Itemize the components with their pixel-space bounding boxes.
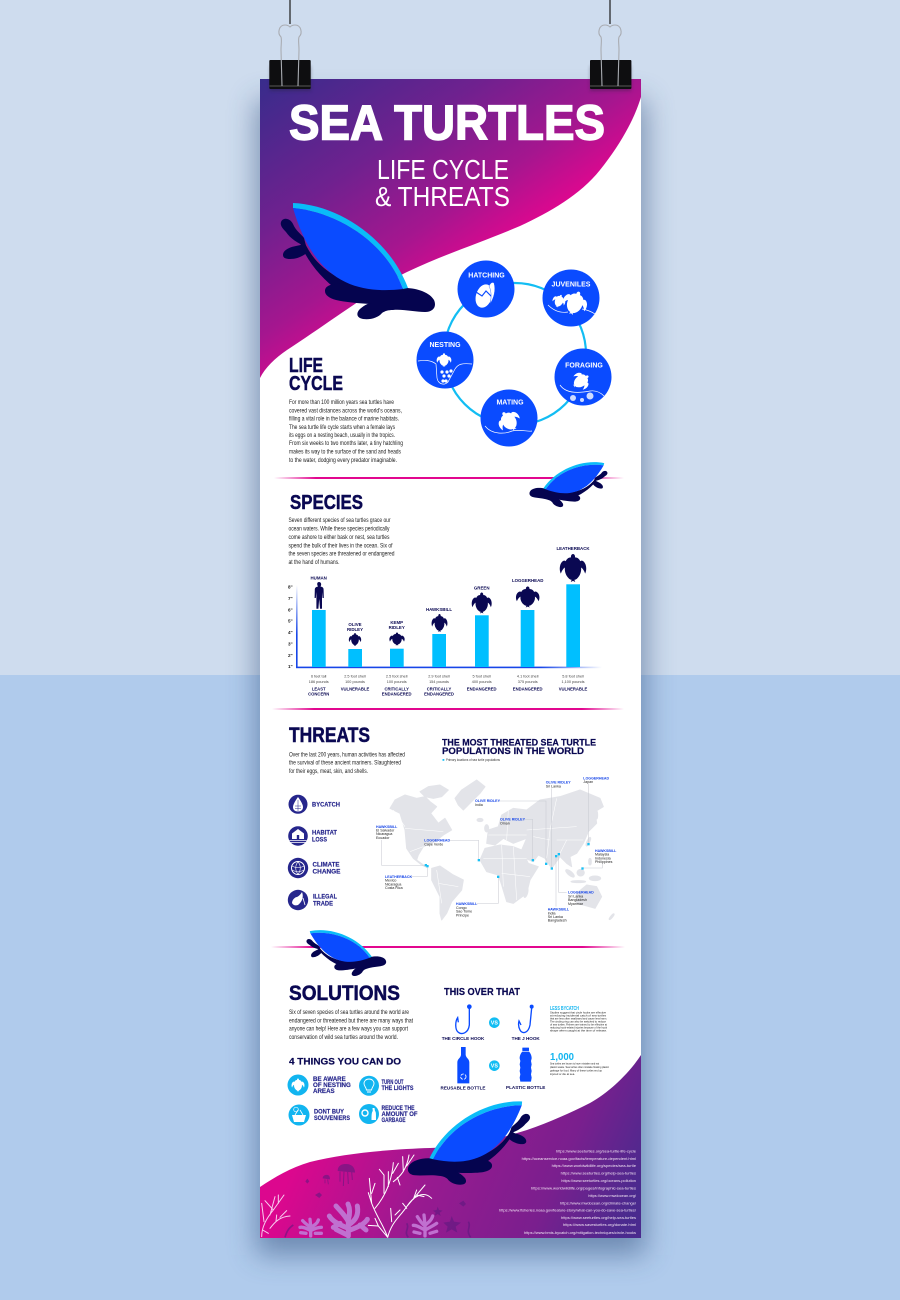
comparison captions: REUSABLE BOTTLE <box>441 1086 485 1090</box>
map labels: Nicaragua <box>376 832 392 836</box>
y axis labels: 5" <box>288 619 293 624</box>
callout: less bycatch <box>550 1006 607 1032</box>
action: souvenirs: DONT BUY <box>314 1108 345 1116</box>
action: lights: TURN OUT <box>382 1079 404 1086</box>
threat: habitat loss: LOSS <box>312 836 327 844</box>
text: life cycle intro: From six weeks to two months later, a tiny hatchling <box>289 440 403 447</box>
divider <box>272 708 624 710</box>
text: life cycle intro: The sea turtle life cycle starts when a female lays <box>289 424 395 431</box>
lilac corals <box>300 1204 437 1236</box>
map labels: OLIVE RIDLEY <box>546 780 571 784</box>
callout: 1,000 <box>550 1052 609 1076</box>
panel: life cycle <box>289 260 612 464</box>
text: life cycle intro: to the water, dodging every predator imaginable. <box>289 457 397 464</box>
map heading <box>442 737 596 756</box>
header wave <box>260 79 641 378</box>
text: solutions intro <box>289 1009 413 1041</box>
size captions: 4.1 foot shell <box>517 674 539 678</box>
source links: https://www.seeturtles.org/help-sea-turtles <box>561 1170 636 1176</box>
threat: illegal trade: ILLEGAL <box>313 894 337 900</box>
badge: vs hooks: VS <box>491 1021 498 1027</box>
text: life cycle intro: makes its way to the surface of the sand and heads <box>289 449 401 456</box>
status labels: CONCERN <box>308 692 329 696</box>
text: solutions intro: Six of seven species of sea turtles around the world are <box>289 1009 409 1016</box>
size captions: 1,100 pounds <box>561 680 585 684</box>
source links: https://www.worldwildlife.org/pages/infographic-sea-turtles <box>531 1186 636 1190</box>
map labels: Sao Tome <box>456 910 472 914</box>
text: life cycle intro: For more than 100 million years sea turtles have <box>289 399 394 406</box>
map labels: India <box>548 912 555 916</box>
stage: juveniles <box>542 270 600 326</box>
callout: 1,000: plastic waste. Sea turtles often mistake floating plastic <box>550 1065 609 1069</box>
chart: life cycle ring <box>444 283 586 425</box>
source links: https://www.mwdocean.org/climate-change/ <box>560 1200 637 1206</box>
callout: less bycatch: that are less often swallowed and cause less harm. <box>550 1016 607 1020</box>
y axis labels: 6" <box>288 607 293 612</box>
map labels: Indonesia <box>595 856 611 860</box>
species names: GREEN <box>474 586 490 590</box>
source links: https://www.bmis-bycatch.org/mitigation-techniques/circle-hooks <box>524 1230 636 1235</box>
species names: HUMAN <box>311 576 327 580</box>
subtitle: & THREATS <box>375 181 510 212</box>
map labels <box>376 776 617 922</box>
source links: https://oceanservice.noaa.gov/facts/temperature-dependent.html <box>522 1156 636 1161</box>
species names: HAWKSBILL <box>426 607 452 612</box>
map labels: Philippines <box>595 860 613 864</box>
heading: solutions: SOLUTIONS <box>289 982 400 1005</box>
threat: illegal trade: TRADE <box>313 900 333 908</box>
callout: less bycatch: at reducing incidental catch of sea turtles <box>550 1014 607 1018</box>
threat: bycatch: BYCATCH <box>312 802 340 808</box>
heading: threats: THREATS <box>289 724 370 747</box>
turtle: footer <box>407 1092 531 1190</box>
stage: hatching: HATCHING <box>468 272 505 280</box>
y axis labels: 8" <box>288 584 293 590</box>
source links: https://www.fisheries.noaa.gov/feature-story/what-can-you-do-save-sea-turtles/ <box>499 1208 637 1212</box>
map labels: Mexico <box>385 878 396 882</box>
status labels: ENDANGERED <box>513 686 543 692</box>
map labels: HAWKSBILL <box>548 908 570 912</box>
y axis labels: 4" <box>288 630 293 635</box>
map labels: LOGGERHEAD <box>424 838 450 842</box>
text: solutions intro: anyone can help! Here are a few ways you can support <box>289 1026 408 1033</box>
heading: species: SPECIES <box>290 492 363 514</box>
status labels: ENDANGERED <box>424 692 454 696</box>
comparison captions <box>441 1036 545 1090</box>
map labels: Sri Lanka <box>546 784 561 788</box>
bar chart: species size <box>288 546 602 696</box>
action: nesting areas <box>288 1074 351 1096</box>
map labels: LEATHERBACK <box>385 875 412 879</box>
source links: https://www.savesturtles.org/donate.html <box>563 1222 636 1227</box>
status labels: VULNERABLE <box>559 686 588 692</box>
heading: four things: 4 THINGS YOU CAN DO <box>289 1056 401 1068</box>
status labels: ENDANGERED <box>382 692 412 696</box>
callout: 1,000: injured or die at sea. <box>550 1072 575 1076</box>
stage: mating: MATING <box>496 400 524 406</box>
species names: OLIVE <box>348 622 362 627</box>
subtitle: LIFE CYCLE <box>377 154 509 185</box>
threat: climate change <box>288 858 340 878</box>
stage: hatching <box>458 260 514 318</box>
callout: less bycatch: LESS BYCATCH <box>550 1006 579 1012</box>
size captions: 186 pounds <box>309 680 329 684</box>
size captions: 100 pounds <box>345 680 365 684</box>
heading: life cycle: CYCLE <box>289 373 343 395</box>
poster sheet <box>260 79 641 1238</box>
map labels: Costa Rica <box>385 886 403 890</box>
icon: circle hook <box>456 1005 471 1034</box>
panel: solutions <box>288 982 418 1126</box>
action: garbage: GARBAGE <box>382 1117 406 1124</box>
map labels: Sri Lanka <box>548 915 563 919</box>
size captions: 5.8 foot shell <box>562 674 584 678</box>
y axis labels: 3" <box>288 641 293 646</box>
callout: less bycatch: of sea turtles. Fishers are trained to be effective at <box>550 1022 607 1026</box>
stage: foraging: FORAGING <box>565 362 603 370</box>
stage: nesting <box>416 332 474 388</box>
map labels: LOGGERHEAD <box>568 890 594 894</box>
map labels: HAWKSBILL <box>456 902 478 906</box>
stage: nesting: NESTING <box>429 342 461 349</box>
action: lights: THE LIGHTS <box>382 1085 414 1092</box>
status labels: VULNERABLE <box>341 686 370 692</box>
poster shadow <box>256 100 646 1255</box>
species names: RIDLEY <box>389 625 405 630</box>
y axis labels <box>288 584 293 669</box>
size captions: 100 pounds <box>387 680 407 684</box>
turtle: solutions divider <box>304 915 388 985</box>
divider <box>274 477 624 479</box>
footer wave <box>260 1055 641 1238</box>
map labels: Sri Lanka <box>568 894 583 898</box>
comparison captions: THE CIRCLE HOOK <box>442 1036 485 1041</box>
subtitle <box>375 154 510 212</box>
size captions: 400 pounds <box>472 680 492 684</box>
sea life silhouettes <box>285 1164 471 1237</box>
icon: j hook <box>519 1005 533 1033</box>
species names <box>311 546 590 632</box>
threat: bycatch <box>288 795 340 814</box>
map legend: Primary locations of sea turtle populations <box>446 758 500 762</box>
map labels: OLIVE RIDLEY <box>500 818 526 822</box>
action: garbage: REDUCE THE <box>382 1105 414 1112</box>
action: nesting areas: AREAS <box>313 1088 335 1095</box>
size captions: 2.5 foot shell <box>386 674 408 678</box>
species names: RIDLEY <box>347 627 363 632</box>
y axis labels: 7" <box>288 596 293 601</box>
text: species intro: Seven different species of sea turtles grace our <box>288 517 391 524</box>
white corals <box>262 1155 432 1237</box>
status labels: LEAST <box>312 686 326 692</box>
species names: LEATHERBACK <box>556 546 590 551</box>
binder clip: right <box>590 0 631 91</box>
size captions: 2.5 foot shell <box>344 674 366 678</box>
threat: climate change: CLIMATE <box>312 862 340 868</box>
size captions: 2.9 foot shell <box>428 674 450 678</box>
text: life cycle intro <box>289 399 403 464</box>
map labels: Bangladesh <box>548 918 567 922</box>
icon: reusable bottle <box>457 1047 469 1083</box>
y axis labels: 1" <box>288 664 293 669</box>
map labels: India <box>475 803 483 807</box>
map labels: Malaysia <box>595 852 609 856</box>
map labels: Nicaragua <box>385 882 401 886</box>
text: solutions intro: endangered or threatened but there are many ways that <box>289 1017 413 1024</box>
text: species intro: the seven species are threatened or endangered <box>288 551 395 558</box>
callout: 1,000: garbage for food. Many of these turtles end up <box>550 1068 602 1072</box>
map labels: Myanmar <box>568 902 584 906</box>
map labels: Ecuador <box>376 836 390 840</box>
text: species intro <box>288 517 395 566</box>
world map <box>382 780 615 920</box>
map labels: El Salvador <box>376 828 395 832</box>
size captions: 6 feet tall <box>311 674 327 678</box>
panel: threats <box>288 724 617 922</box>
threat: habitat loss <box>288 826 337 846</box>
status labels: CRITICALLY <box>427 686 451 692</box>
source links: https://www.mwdocean.org/ <box>588 1193 637 1198</box>
map labels: Japan <box>583 780 593 784</box>
country borders <box>393 798 583 903</box>
text: life cycle intro: its eggs on a nesting beach, usually in the tropics. <box>289 432 395 439</box>
source links: https://www.seeturtles.org/sea-turtle-life-cycle <box>556 1148 636 1154</box>
action: nesting areas: OF NESTING <box>313 1082 351 1089</box>
turtle: header <box>281 203 435 319</box>
text: species intro: ocean waters. While these species periodically <box>288 526 390 533</box>
callout: less bycatch: Studies suggest that circle hooks are effective <box>550 1010 606 1014</box>
silhouettes <box>315 554 586 646</box>
text: solutions intro: conservation of wild sea turtles around the world. <box>289 1034 398 1041</box>
title: SEA TURTLES <box>289 96 605 150</box>
heading: life cycle: LIFE <box>289 355 323 377</box>
action: lights <box>359 1076 414 1096</box>
size captions: 154 pounds <box>429 680 449 684</box>
population markers <box>425 843 590 878</box>
callout: less bycatch: reducing hook-related injuries because of the hook <box>550 1026 607 1030</box>
bars <box>312 584 580 667</box>
action: souvenirs <box>288 1104 350 1126</box>
callout: 1,000: Sea turtles are known to have mistaken and eat <box>550 1062 599 1066</box>
size captions: 5 foot shell <box>473 674 491 678</box>
leader lines <box>382 783 602 907</box>
divider <box>271 946 625 948</box>
map labels: LOGGERHEAD <box>583 776 609 780</box>
status labels <box>308 686 588 696</box>
status labels: CRITICALLY <box>384 686 409 692</box>
text: life cycle intro: covered vast distances across the world's oceans, <box>289 407 402 414</box>
comparison captions: PLASTIC BOTTLE <box>506 1085 545 1090</box>
stage: juveniles: JUVENILES <box>552 282 591 288</box>
action: garbage <box>359 1104 418 1124</box>
status labels: ENDANGERED <box>467 686 497 692</box>
size captions <box>309 674 585 684</box>
callout: 1,000: 1,000 <box>550 1052 574 1063</box>
map heading: THE MOST THREATED SEA TURTLE <box>442 737 596 748</box>
map labels: Bangladesh <box>568 898 587 902</box>
icon: plastic bottle <box>520 1048 532 1082</box>
binder clip: left <box>269 0 311 91</box>
text: species intro: at the hand of humans. <box>288 559 340 566</box>
continents <box>390 780 615 920</box>
text: threats intro <box>289 751 405 775</box>
text: threats intro: Over the last 200 years, human activities has affected <box>289 751 405 758</box>
source links: https://www.worldwildlife.org/species/sea-turtle <box>552 1163 636 1168</box>
map labels: OLIVE RIDLEY <box>475 799 501 803</box>
map labels: Cape Verde <box>424 842 443 846</box>
species names: LOGGERHEAD <box>512 578 543 583</box>
text: threats intro: the survival of these ancient mariners. Slaughtered <box>289 760 401 767</box>
comparison graphics <box>456 1005 533 1083</box>
map labels: Oman <box>500 822 510 826</box>
source links <box>499 1148 637 1235</box>
callout: less bycatch: shape when caught at the time of release. <box>550 1028 607 1032</box>
threat: climate change: CHANGE <box>312 868 340 876</box>
badge: vs bottles: VS <box>491 1064 498 1070</box>
threat: illegal trade <box>288 890 337 910</box>
map labels: HAWKSBILL <box>376 825 398 829</box>
stage: mating <box>480 390 538 446</box>
action: garbage: AMOUNT OF <box>382 1111 418 1118</box>
source links: https://www.seeturtles.org/oceans-pollution <box>561 1178 636 1183</box>
map labels: Principe <box>456 914 469 918</box>
panel: species <box>288 492 602 696</box>
size captions: 375 pounds <box>518 680 538 684</box>
map heading: POPULATIONS IN THE WORLD <box>442 745 584 756</box>
heading: this over that: THIS OVER THAT <box>444 986 521 998</box>
turtle: species divider <box>528 447 610 516</box>
callout: less bycatch: The circling ring can also be switched to reduce <box>550 1020 606 1024</box>
y axis labels: 2" <box>288 653 293 658</box>
comparison captions: THE J HOOK <box>512 1036 540 1041</box>
text: species intro: come ashore to either bask or nest, sea turtles <box>288 534 390 541</box>
stage: foraging <box>554 348 612 406</box>
action: souvenirs: SOUVENIERS <box>314 1115 350 1122</box>
map labels: HAWKSBILL <box>595 849 617 853</box>
panel: this over that <box>441 986 609 1090</box>
text: species intro: spend the bulk of their lives in the ocean. Six of <box>288 542 393 549</box>
heading: life cycle <box>289 355 343 395</box>
text: threats intro: for their eggs, meat, skin, and shells. <box>289 768 368 775</box>
threat: habitat loss: HABITAT <box>312 830 337 836</box>
map labels: Congo <box>456 906 467 910</box>
action: nesting areas: BE AWARE <box>313 1076 346 1083</box>
species names: KEMP <box>390 620 403 625</box>
source links: https://www.seeturtles.org/help-sea-turtles <box>561 1215 636 1220</box>
text: life cycle intro: filling a vital role in the balance of marine habitats. <box>289 416 399 423</box>
